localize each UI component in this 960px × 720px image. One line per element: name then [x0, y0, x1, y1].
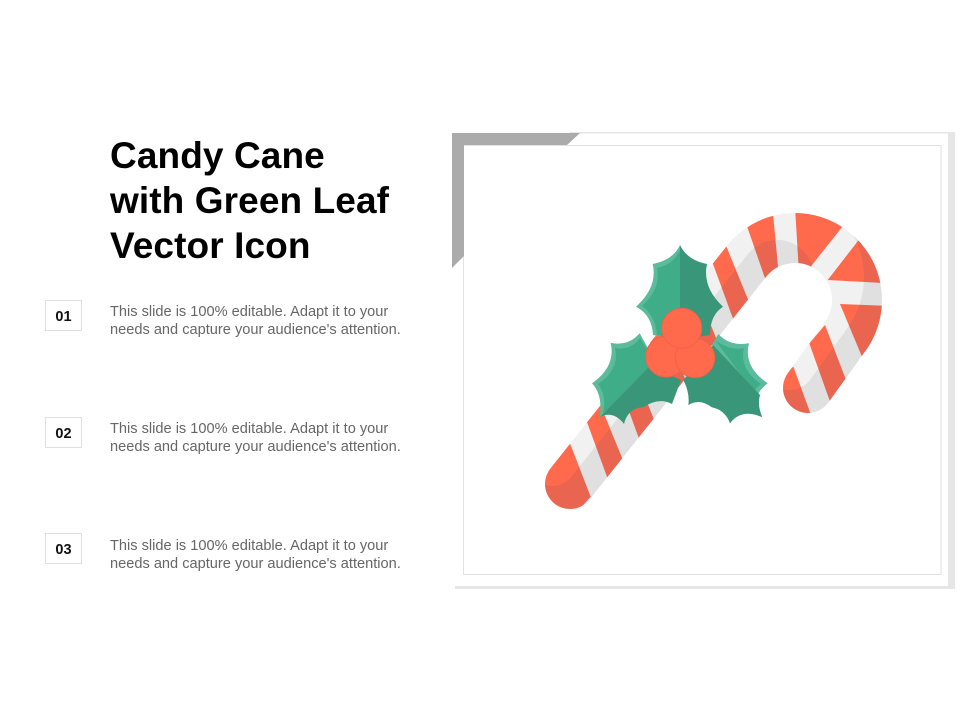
- panel: outer frame: [455, 132, 955, 589]
- title: Vector Icon: [110, 225, 311, 266]
- text block 01: This slide is 100% editable. Adapt it to your: [110, 304, 388, 320]
- number badge 03: [45, 533, 82, 564]
- text block 01: needs and capture your audience's attention.: [110, 322, 401, 338]
- text block 01: [110, 304, 401, 338]
- icon: holly leaves and berries: [592, 245, 768, 424]
- bottom left leaf: [592, 333, 681, 424]
- berry top: [662, 308, 702, 348]
- number badge 03: 03: [55, 542, 72, 558]
- icon: candy cane: [545, 213, 882, 509]
- number badge 02: [45, 417, 82, 448]
- text block 02: needs and capture your audience's attention.: [110, 439, 401, 455]
- grey corner accent: [452, 133, 580, 268]
- number badge 01: 01: [55, 309, 72, 325]
- number badge 01: [45, 300, 82, 331]
- text block 02: [110, 421, 401, 455]
- berry right: [675, 338, 715, 378]
- text block 03: This slide is 100% editable. Adapt it to your: [110, 538, 388, 554]
- title: [110, 135, 389, 266]
- item 03: [45, 533, 401, 572]
- bottom right leaf: [683, 334, 768, 423]
- title: Candy Cane: [110, 135, 325, 176]
- text block 02: This slide is 100% editable. Adapt it to your: [110, 421, 388, 437]
- text block 03: needs and capture your audience's attention.: [110, 556, 401, 572]
- title: with Green Leaf: [110, 180, 389, 221]
- top leaf: [636, 245, 723, 340]
- picture panel with icon: [452, 132, 955, 589]
- item 01: [45, 300, 401, 338]
- berry left: [646, 336, 686, 377]
- text block 03: [110, 538, 401, 572]
- item 02: [45, 417, 401, 455]
- number badge 02: 02: [55, 426, 72, 442]
